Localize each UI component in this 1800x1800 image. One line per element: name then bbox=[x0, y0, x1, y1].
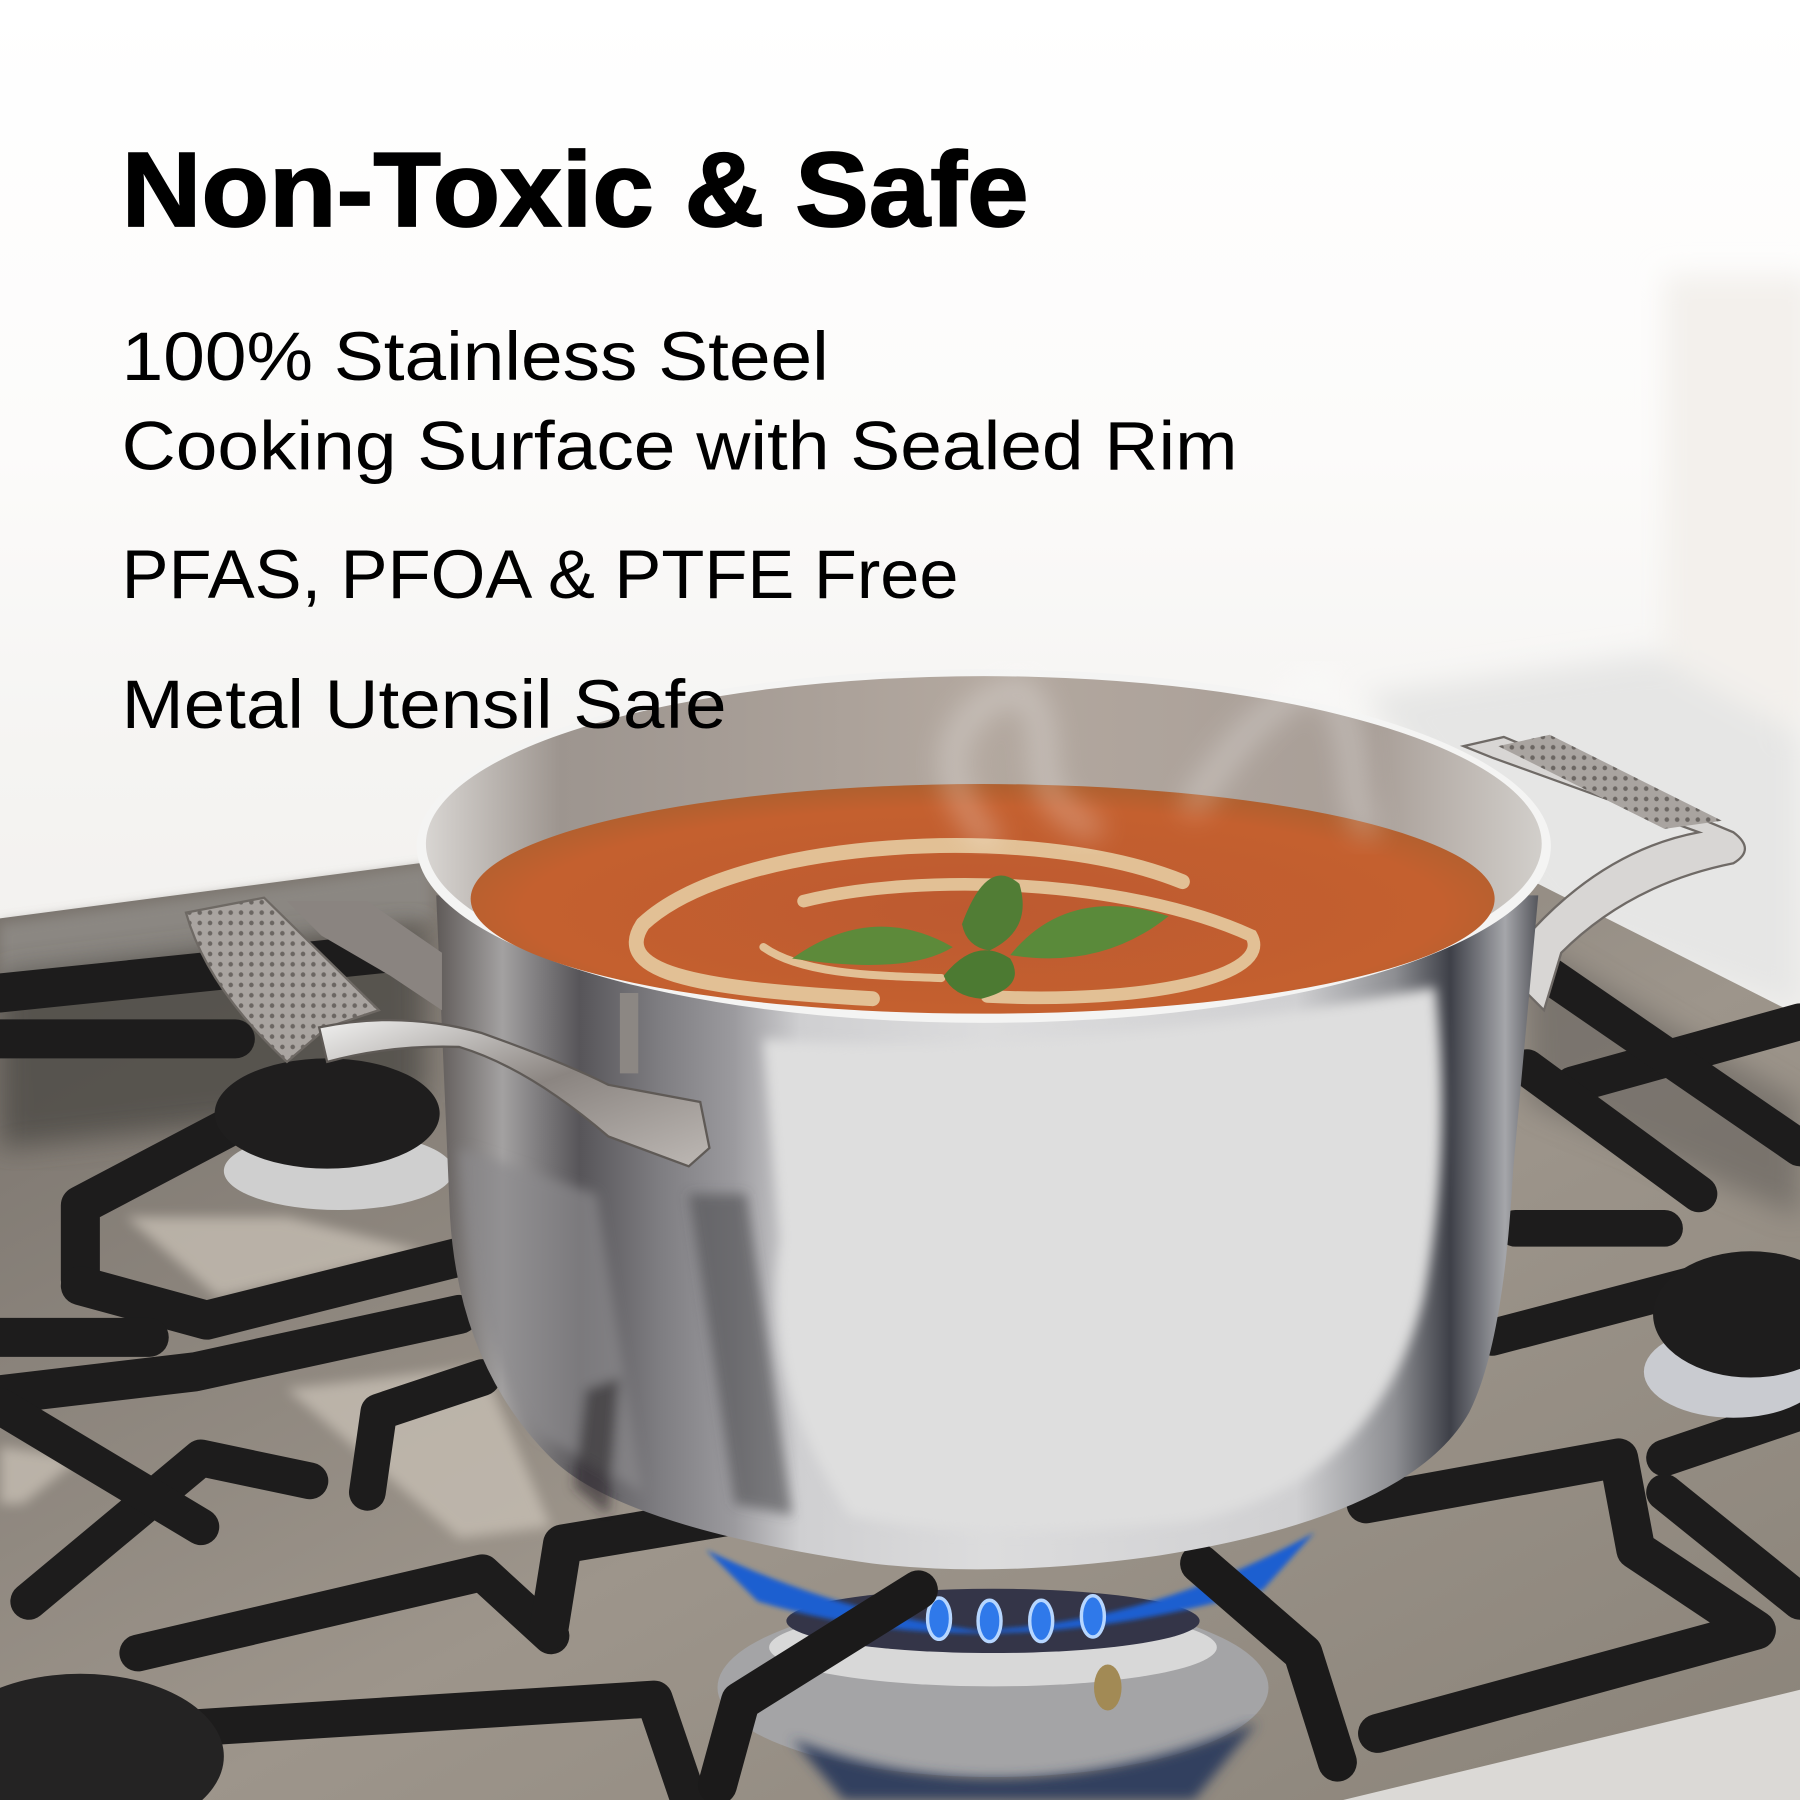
pot: rim and interior bbox=[417, 669, 1551, 1023]
igniter bbox=[1094, 1665, 1122, 1710]
text: stainless steel cooking surface bbox=[122, 318, 1237, 485]
pot: reflections bbox=[459, 1148, 792, 1515]
grate: front left bbox=[0, 1378, 689, 1800]
text: metal utensil safe: Metal Utensil Safe bbox=[122, 666, 727, 743]
text: PFAS free: PFAS, PFOA & PTFE Free bbox=[122, 536, 959, 613]
main burner base bbox=[717, 1589, 1268, 1800]
text: stainless steel cooking surface: 100% Stainless Steel bbox=[122, 318, 829, 395]
text: stainless steel cooking surface: Cooking Surface with Sealed Rim bbox=[122, 408, 1238, 485]
grate: right side bbox=[1492, 976, 1800, 1601]
pot: body bbox=[436, 895, 1538, 1569]
grate: main burner bbox=[549, 1458, 1756, 1733]
flames bbox=[706, 1533, 1314, 1642]
pot: near handle bbox=[186, 898, 709, 1166]
grate: back left bbox=[0, 953, 459, 1395]
cooktop surface bbox=[0, 861, 1800, 1800]
cooktop: polished highlights bbox=[0, 1217, 551, 1538]
soup: cream swirl bbox=[636, 846, 1254, 999]
cooktop: back control strip bbox=[0, 867, 430, 987]
pot: far handle bbox=[1464, 735, 1745, 1010]
cooktop front edge bbox=[1343, 1690, 1800, 1800]
pot: soup bbox=[471, 784, 1495, 1014]
burner: front left cap bbox=[0, 1674, 224, 1800]
soup: basil leaves bbox=[792, 875, 1169, 999]
burner: back left bbox=[215, 1058, 453, 1210]
cooktop: dark recess at back left bbox=[0, 924, 425, 1148]
pot: central highlight bbox=[763, 987, 1441, 1531]
grate arm over burner bbox=[717, 1564, 1337, 1785]
burner: right bbox=[1644, 1251, 1800, 1418]
background: counter and canister bbox=[1366, 276, 1800, 1010]
stove grates bbox=[0, 953, 1800, 1800]
pot bbox=[186, 669, 1745, 1569]
cooktop: dark recess at back right bbox=[1527, 941, 1800, 1217]
pot: steam bbox=[953, 677, 1366, 838]
title: Non-Toxic & Safe bbox=[122, 131, 1029, 249]
